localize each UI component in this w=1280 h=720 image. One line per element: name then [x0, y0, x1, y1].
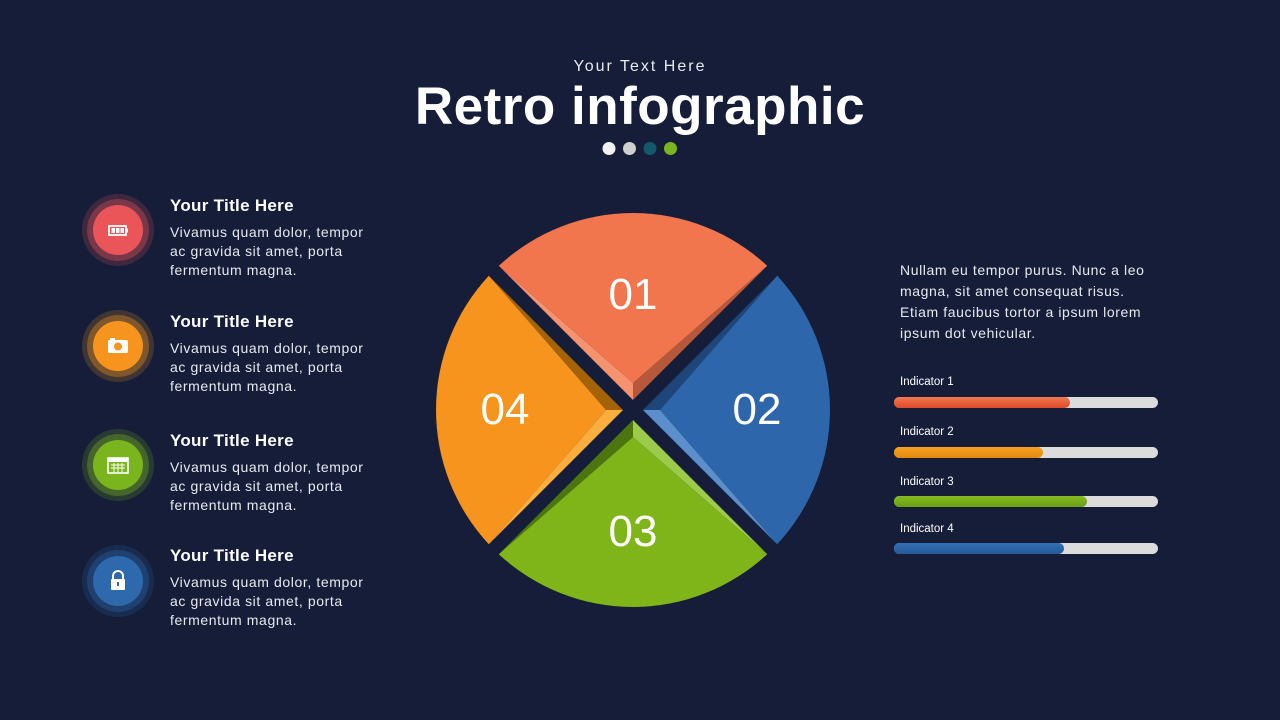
sector 04: 04 — [481, 385, 529, 434]
item 1 — [82, 194, 364, 278]
sector 04 — [436, 276, 623, 544]
icon: battery — [82, 194, 154, 266]
sector 02: 02 — [733, 385, 781, 434]
item 4 — [82, 545, 364, 628]
item 1: Your Title Here — [170, 196, 294, 215]
right paragraph: Nullam eu tempor purus. Nunc a leo — [900, 262, 1145, 278]
subtitle: Your Text Here — [574, 58, 706, 75]
indicator 3: Indicator 3 — [900, 476, 954, 488]
sector 01: 01 — [609, 270, 657, 319]
item 1: fermentum magna. — [170, 262, 297, 278]
item 2: Your Title Here — [170, 312, 294, 331]
item 4: Your Title Here — [170, 546, 294, 565]
item 3: Your Title Here — [170, 431, 294, 450]
item 1: Vivamus quam dolor, tempor — [170, 224, 364, 240]
indicator 4 — [894, 523, 1158, 554]
item 3 — [82, 429, 364, 513]
indicator 1 — [894, 376, 1158, 408]
indicator 2 — [894, 426, 1158, 458]
right paragraph: magna, sit amet consequat risus. — [900, 283, 1125, 299]
item 3: fermentum magna. — [170, 497, 297, 513]
title dots — [602, 142, 677, 155]
item 3: ac gravida sit amet, porta — [170, 478, 343, 494]
indicator 1: Indicator 1 — [900, 376, 954, 388]
right paragraph — [900, 262, 1145, 341]
indicator 3 — [894, 476, 1158, 507]
sector 03 — [499, 420, 767, 607]
icon: calendar — [82, 429, 154, 501]
sector 01 — [499, 213, 767, 400]
indicator 4: Indicator 4 — [900, 523, 954, 535]
item 2: Vivamus quam dolor, tempor — [170, 340, 364, 356]
right paragraph: Etiam faucibus tortor a ipsum lorem — [900, 304, 1141, 320]
icon: camera — [82, 310, 154, 382]
item 2: fermentum magna. — [170, 378, 297, 394]
title: Retro infographic — [415, 77, 865, 136]
indicators — [894, 376, 1158, 554]
item 1: ac gravida sit amet, porta — [170, 243, 343, 259]
item 2 — [82, 310, 364, 394]
icon: lock — [82, 545, 154, 617]
item 4: fermentum magna. — [170, 612, 297, 628]
left item list — [82, 194, 364, 628]
sector 03: 03 — [609, 507, 657, 556]
right paragraph: ipsum dot vehicular. — [900, 325, 1036, 341]
item 4: ac gravida sit amet, porta — [170, 593, 343, 609]
sector 02 — [643, 276, 830, 544]
item 4: Vivamus quam dolor, tempor — [170, 574, 364, 590]
item 3: Vivamus quam dolor, tempor — [170, 459, 364, 475]
indicator 2: Indicator 2 — [900, 426, 954, 438]
item 2: ac gravida sit amet, porta — [170, 359, 343, 375]
